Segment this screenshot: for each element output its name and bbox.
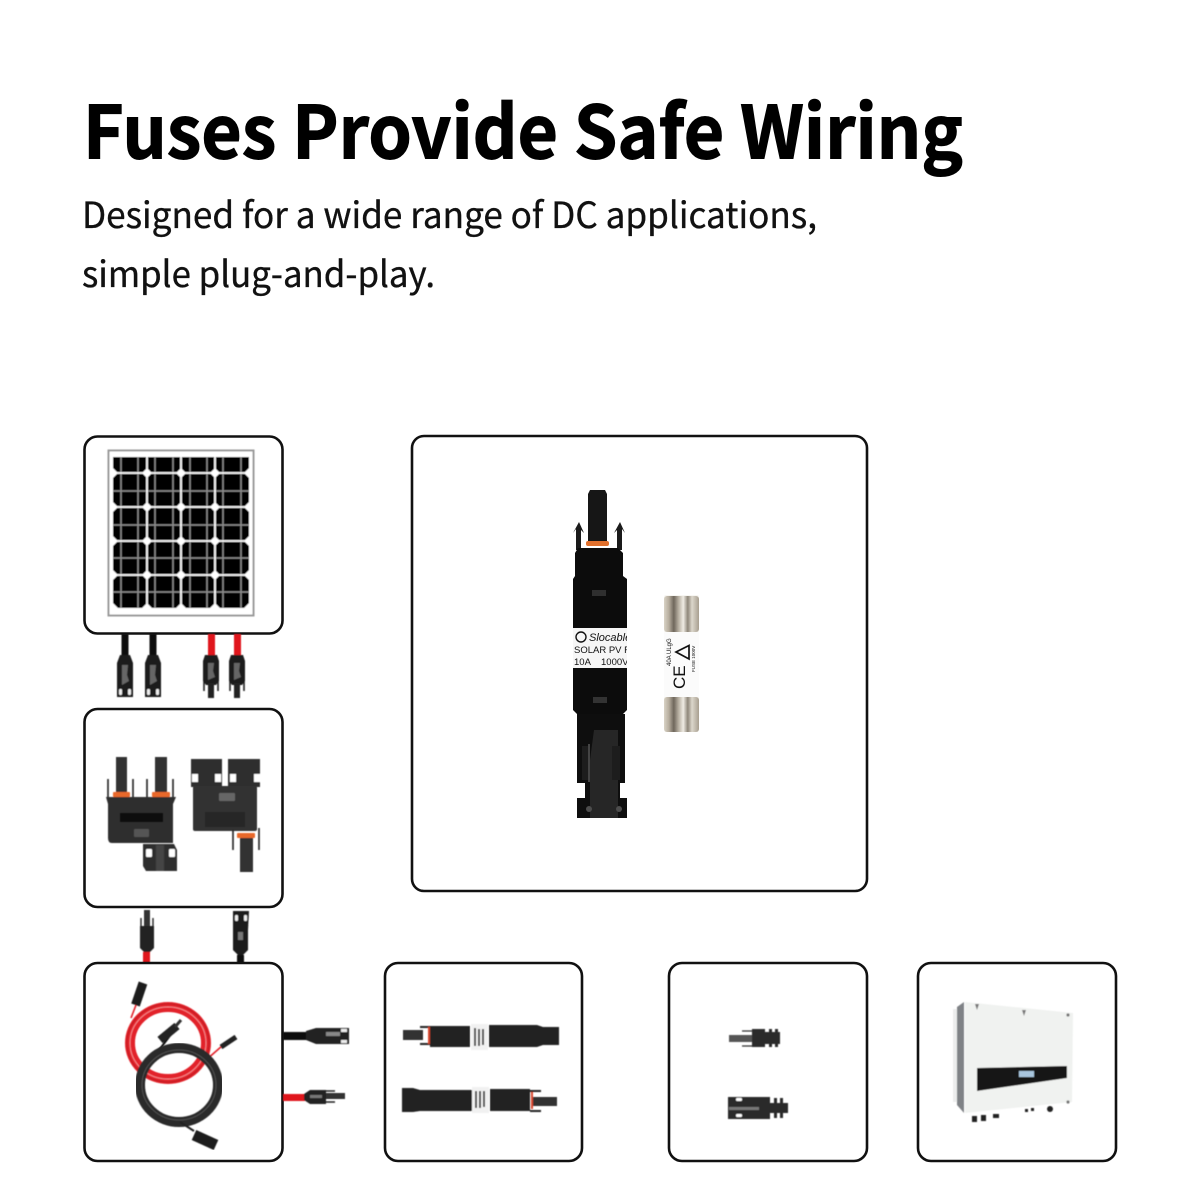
icon: lower fuse holder: [402, 1087, 557, 1113]
subtitle: [82, 187, 817, 298]
panel: branch connectors: [84, 709, 282, 907]
icon: female connector: [728, 1097, 788, 1119]
icon: male connector: [729, 1029, 780, 1047]
fuse holder label: 1000V: [601, 657, 629, 668]
panel: extension cables: [84, 963, 282, 1161]
fuse holder label: Slocable: [589, 632, 631, 644]
subtitle: Designed for a wide range of DC applications,: [82, 187, 817, 239]
red output connectors from solar panel: [203, 634, 245, 698]
fuse CE marking: 40A ULgG: [667, 638, 673, 666]
fuse holder label: [573, 628, 627, 668]
red connector between cables and fuses: [283, 1090, 345, 1104]
subtitle: simple plug-and-play.: [82, 246, 435, 298]
icon: Y branch connector, two into one: [106, 757, 177, 871]
icon: red cable coil: [127, 983, 236, 1082]
icon: cartridge fuse: [664, 595, 699, 732]
title: Fuses Provide Safe Wiring: [83, 74, 963, 180]
red connector between branch and cables: [140, 910, 154, 963]
icon: solar inverter: [953, 1002, 1073, 1122]
black connector between cables and fuses: [283, 1028, 349, 1044]
icon: upper fuse holder: [403, 1024, 559, 1050]
panel: solar panel: [84, 436, 282, 634]
fuse CE marking: FUSE 1000V: [691, 646, 696, 672]
icon: solar module: [108, 450, 254, 616]
panel: inline fuse holders: [385, 963, 582, 1161]
fuse CE marking: [667, 638, 696, 689]
black connector between branch and cables: [233, 911, 249, 963]
icon: Y branch connector, one into two: [191, 759, 260, 872]
fuse holder label: SOLAR PV FUSE: [574, 645, 650, 656]
panel: inverter: [918, 963, 1116, 1161]
black output connectors from solar panel: [117, 634, 161, 697]
icon: PV fuse holder: [573, 490, 627, 818]
panel: fuse holder and fuse: [412, 436, 867, 891]
fuse CE marking: CE: [670, 665, 689, 689]
panel: MC4 connectors: [669, 963, 867, 1161]
fuse holder label: 10A: [574, 657, 592, 668]
icon: black cable coil: [140, 1048, 218, 1145]
